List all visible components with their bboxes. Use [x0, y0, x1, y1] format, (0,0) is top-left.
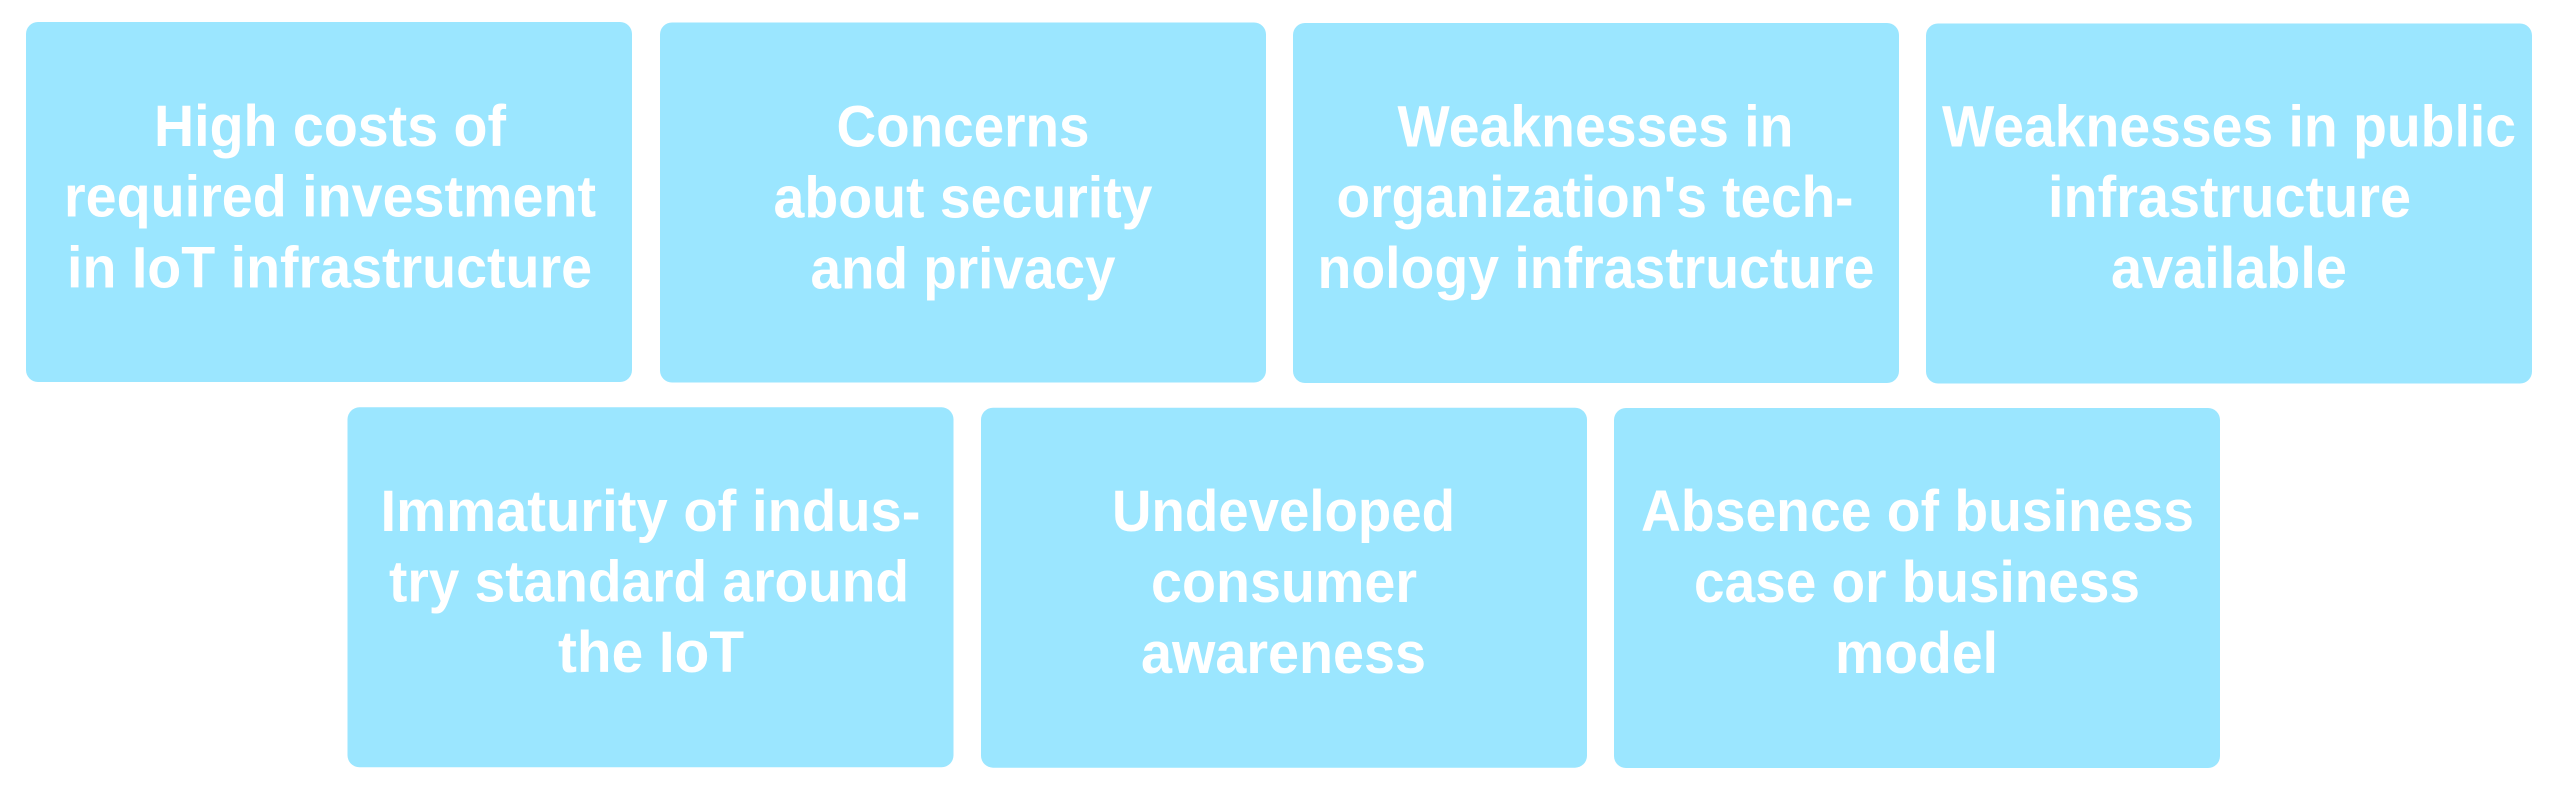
panel: undeveloped consumer awareness [981, 408, 1587, 768]
panel: high costs of required investment: High costs of [154, 94, 507, 159]
panel: weaknesses in organization's technology infrastructure: organization's tech- [1336, 165, 1854, 230]
panel: high costs of required investment [26, 22, 632, 382]
panel: concerns about security and privacy: about security [774, 166, 1152, 231]
panel: absence of business case or business model: case or business [1694, 550, 2140, 615]
panel: undeveloped consumer awareness: Undeveloped [1112, 479, 1455, 544]
panel: concerns about security and privacy: Concerns [836, 95, 1090, 160]
panel: immaturity of industry standard around the IoT: the IoT [558, 620, 744, 685]
panel: high costs of required investment: required investment [64, 165, 596, 230]
panel: weaknesses in organization's technology infrastructure [1293, 23, 1899, 383]
panel: absence of business case or business model: model [1835, 621, 1998, 686]
panel: absence of business case or business model: Absence of business [1641, 479, 2194, 544]
panel: weaknesses in organization's technology infrastructure: nology infrastructure [1318, 236, 1874, 301]
panel: concerns about security and privacy: and privacy [810, 236, 1116, 302]
panel: undeveloped consumer awareness: consumer [1151, 550, 1417, 615]
panel: high costs of required investment: in IoT infrastructure [67, 235, 592, 300]
panel: weaknesses in public infrastructure available [1926, 24, 2532, 384]
panel: undeveloped consumer awareness: awareness [1141, 621, 1426, 686]
panel: weaknesses in organization's technology infrastructure: Weaknesses in [1398, 94, 1794, 160]
panel: immaturity of industry standard around the IoT: try standard around [389, 550, 909, 614]
panel: immaturity of industry standard around the IoT: Immaturity of indus- [380, 479, 920, 544]
panel: absence of business case or business model [1614, 408, 2220, 768]
panel: concerns about security and privacy [660, 22, 1266, 382]
panel: weaknesses in public infrastructure available: Weaknesses in public [1942, 95, 2516, 160]
panel: immaturity of industry standard around the IoT [348, 407, 954, 767]
panel: weaknesses in public infrastructure available: infrastructure [2048, 165, 2411, 230]
panel: weaknesses in public infrastructure available: available [2111, 236, 2347, 301]
